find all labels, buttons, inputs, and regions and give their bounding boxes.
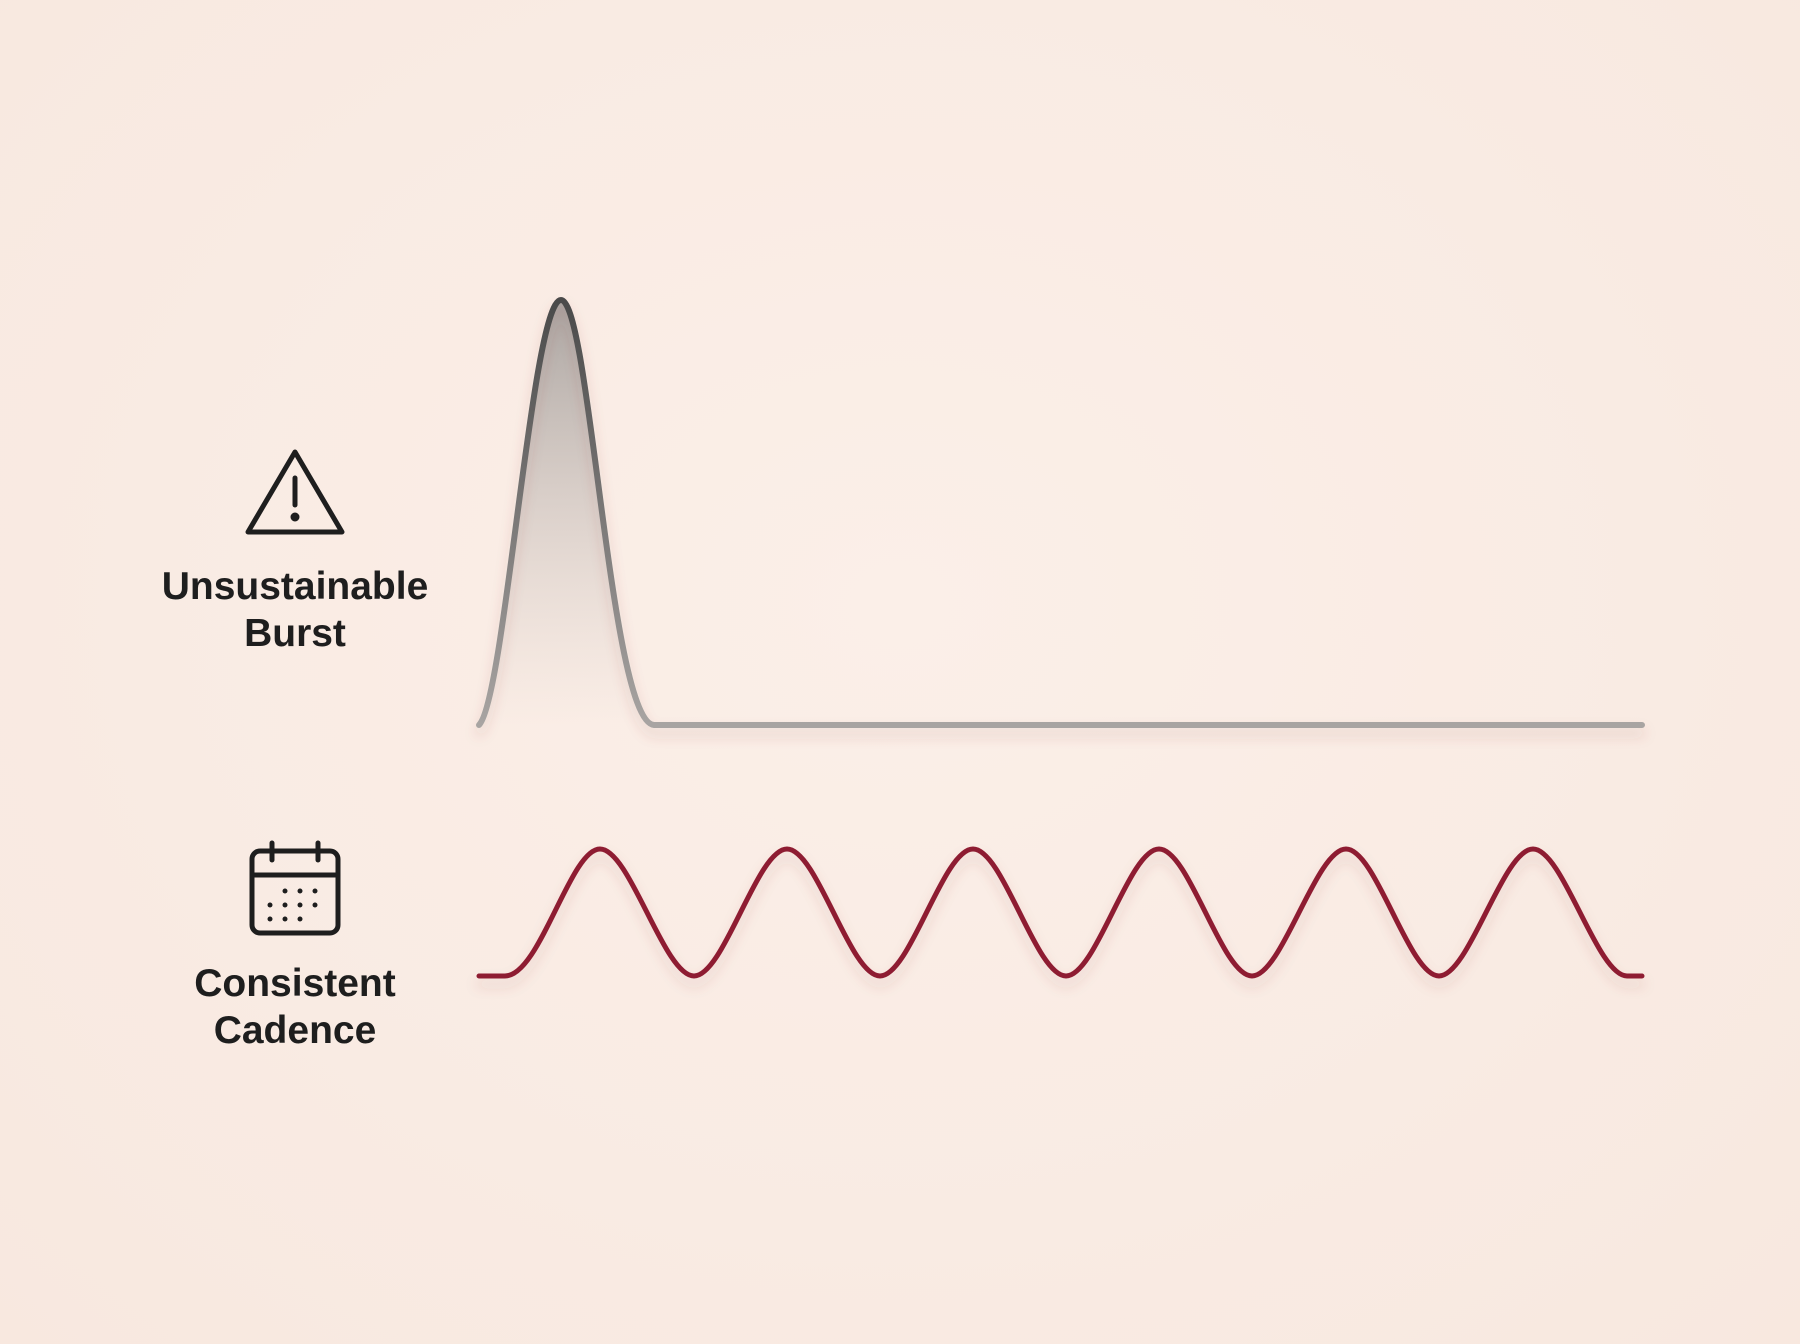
cadence wave	[479, 849, 1642, 976]
label: unsustainable burst	[162, 565, 428, 655]
icon: calendar	[252, 843, 338, 933]
icon: warning triangle	[248, 452, 342, 532]
label: unsustainable burst: Burst	[244, 612, 346, 655]
label: consistent cadence	[194, 962, 396, 1052]
label: consistent cadence: Cadence	[214, 1009, 376, 1052]
label: unsustainable burst: Unsustainable	[162, 565, 428, 608]
label: consistent cadence: Consistent	[194, 962, 396, 1005]
burst curve	[479, 300, 1642, 725]
